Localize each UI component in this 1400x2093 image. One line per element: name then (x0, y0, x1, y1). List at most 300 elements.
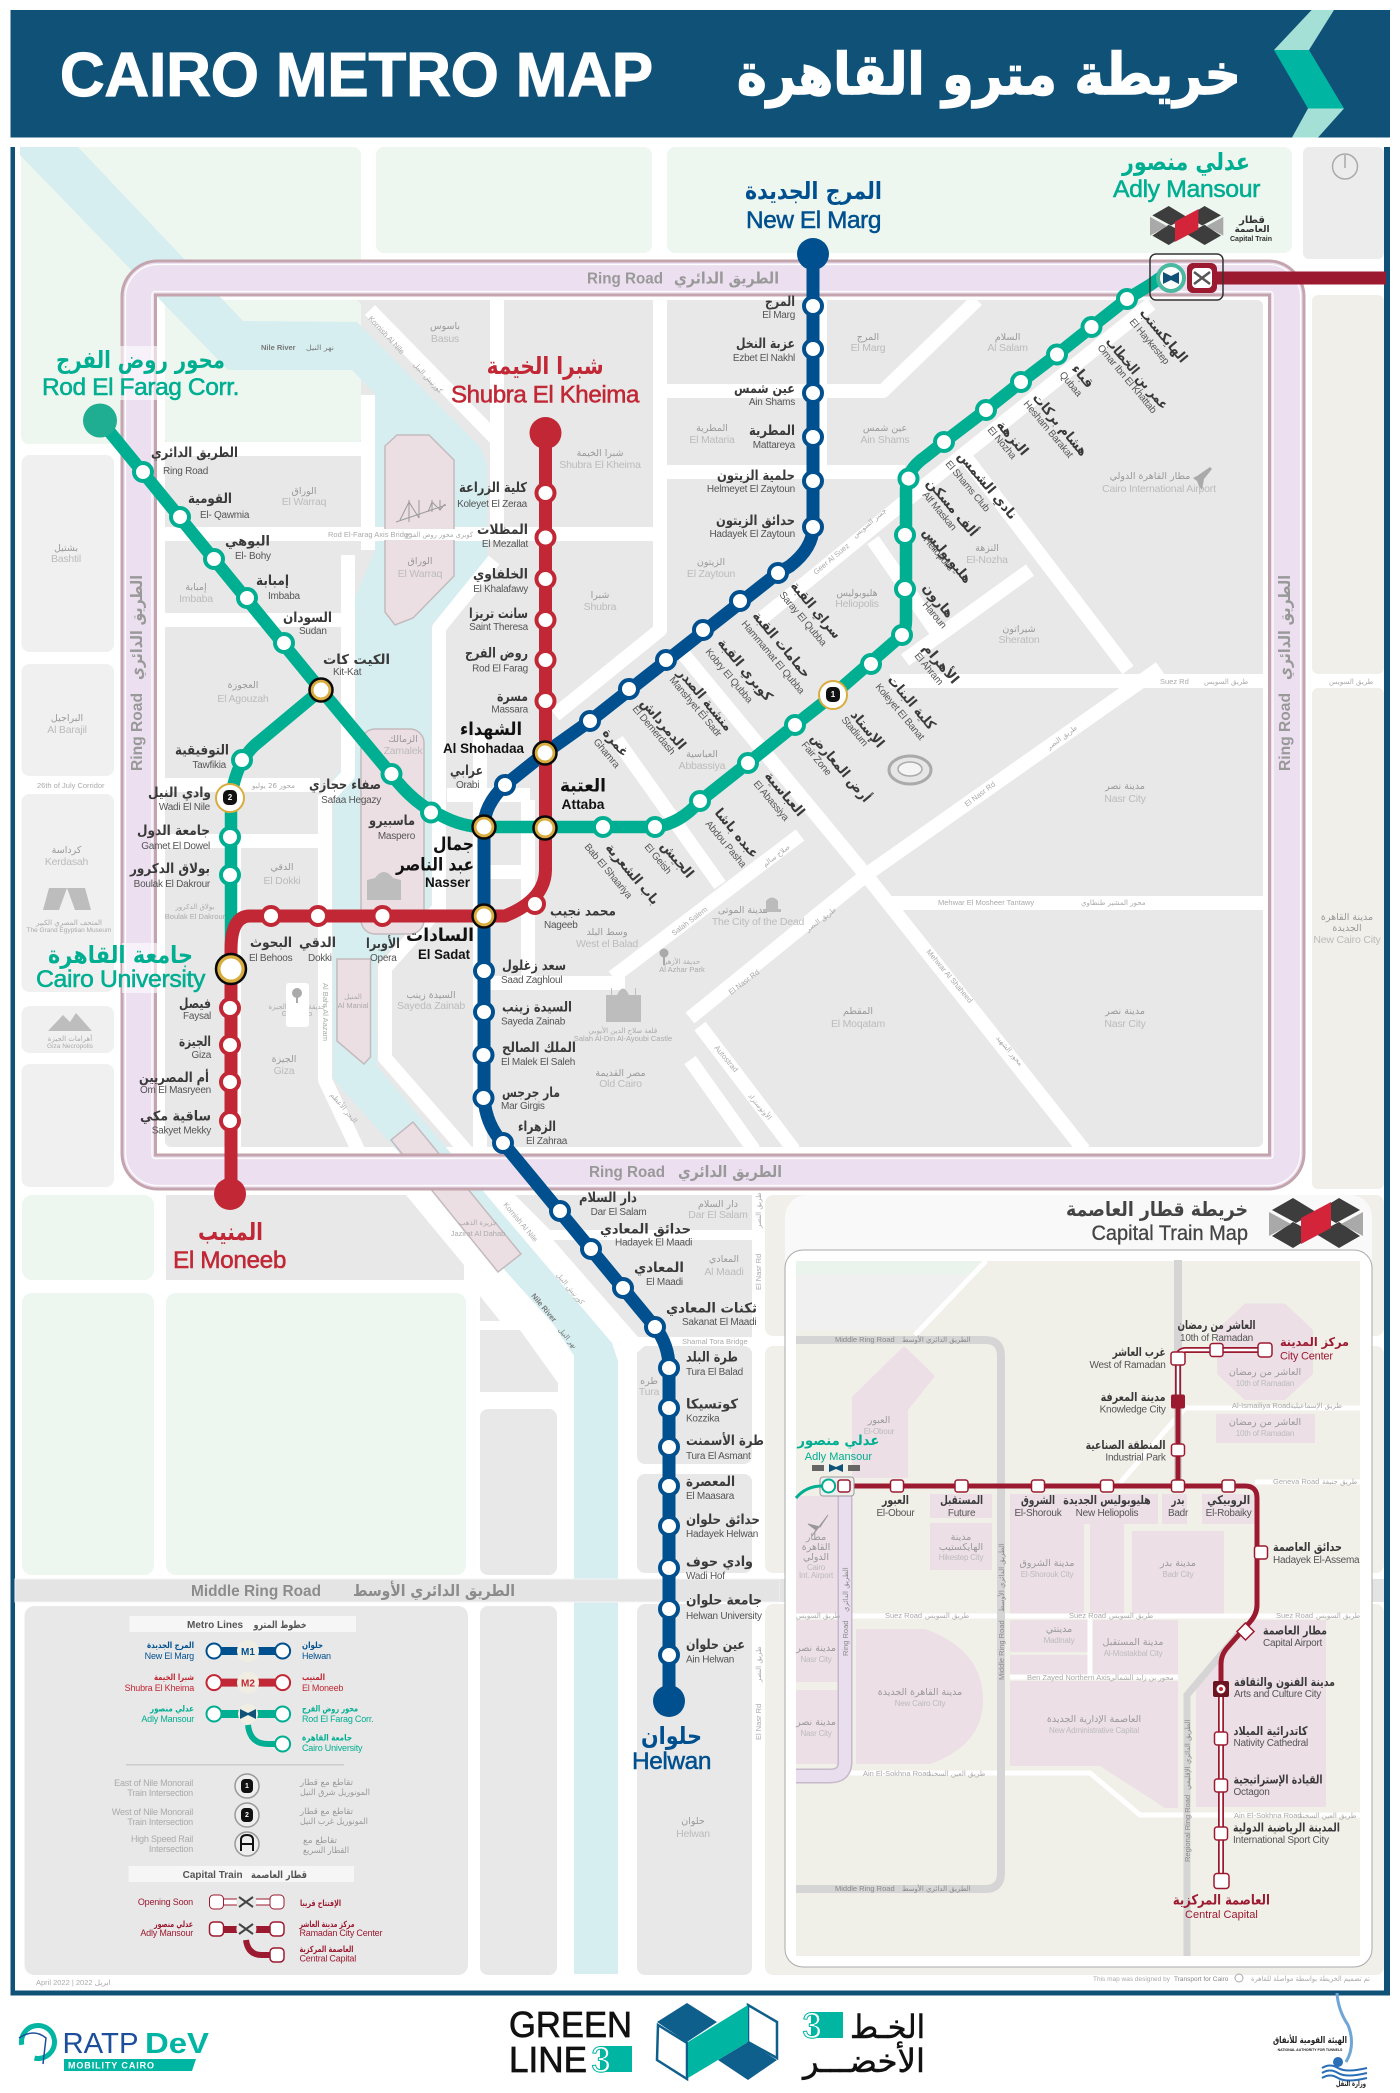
logo: National Authority for Tunnels: وزارة النقل (1336, 2079, 1366, 2088)
ring road white edge lines (126, 264, 1300, 1186)
station: Abdou Pasha: عبده باشا (711, 805, 762, 862)
station: Boulak El Dakrour (129, 861, 211, 890)
station: Gamal Abdel Nasser: Nasser (425, 874, 471, 890)
station: El Mezallat (477, 522, 528, 550)
district and street labels: قلعة صلاح الدين الأيوبي (589, 1026, 657, 1035)
station: Kozzika: كوتسيكا (686, 1397, 738, 1413)
ring road labels (127, 268, 1295, 1182)
map credit: Transport for Cairo (1174, 1976, 1229, 1983)
capital district labels: مدينة بدر (1159, 1558, 1196, 1569)
stations: line 3 (134, 290, 1136, 884)
icon: stadium (889, 756, 931, 784)
district and street labels: جزيرة الذهب (459, 1219, 497, 1227)
station: Hadayek El Maadi: حدائق المعادي (600, 1222, 691, 1238)
legend: line 3: Adly Mansour (141, 1714, 194, 1724)
station: El Haykestep: El Haykestep (1127, 317, 1172, 367)
street network (160, 300, 1268, 1350)
district and street labels: Sayeda Zainab (397, 1000, 465, 1012)
district and street labels: العجوزة (228, 680, 258, 691)
capital district labels: Badr City (1162, 1570, 1194, 1579)
station: El Zahraa: El Zahraa (526, 1136, 568, 1147)
station: International Sport City: المدينة الرياضية الدولية (1233, 1820, 1340, 1836)
station: Helwan University (686, 1592, 762, 1622)
terminal heading: Helwan (632, 1722, 711, 1775)
station: Hadayek Helwan: Hadayek Helwan (686, 1529, 758, 1540)
station: El Marg: المرج (765, 294, 795, 310)
station labels: line 1 north (707, 294, 796, 540)
station: Koleyet El Banat: Koleyet El Banat (873, 682, 926, 743)
station: Ain Shams: عين شمس (734, 381, 795, 397)
district and street labels: دار السلام (698, 1199, 738, 1210)
road name labels: طريق السويس (1329, 678, 1374, 686)
station: El-Robaiky: الروبيكي (1207, 1493, 1250, 1508)
bridge road strip (325, 529, 475, 540)
legend: opening soon (138, 1892, 341, 1912)
logo: capital train top: Capital Train (1230, 236, 1272, 243)
capital road labels (796, 1335, 1361, 1893)
capital road labels: الطريق الدائري الأوسط (997, 1543, 1006, 1612)
station: El Maadi: المعادي (634, 1260, 684, 1276)
station: Opera: الأوبرا (366, 935, 400, 952)
district and street labels: Giza (274, 1065, 295, 1077)
legend: M2 (125, 1672, 343, 1694)
legend: M1: New El Marg (145, 1651, 194, 1661)
station: Gamal Abdel Nasser: جمال (433, 834, 474, 855)
legend: M2: المنيب (302, 1673, 325, 1683)
capital district labels: Madinaty (1044, 1636, 1075, 1645)
station: El Ahram: الأهرام (919, 640, 963, 687)
station: Faysal: Faysal (183, 1011, 211, 1022)
station: Abdou Pasha: Abdou Pasha (703, 819, 748, 870)
capital district labels: القاهرة (802, 1542, 830, 1553)
legend header: Metro Lines: Metro Lines (187, 1620, 244, 1631)
station: Al Shohadaa: Al Shohadaa (443, 740, 524, 756)
legend: opening soon: الإفتتاح قريبا (300, 1899, 341, 1909)
terminals (83, 238, 829, 1717)
capital train opening soon sections (1178, 1350, 1265, 1881)
district and street labels: New Cairo City (1313, 934, 1382, 946)
legend: capital train line: عدلي منصور (153, 1920, 193, 1930)
road name labels: كورنيش النيل (554, 1271, 586, 1307)
logo: Green Line 3: الأخضـــر (801, 2041, 925, 2080)
legend: high speed rail: Intersection (149, 1844, 193, 1854)
legend: capital train line: مركز مدينة العاشر (299, 1920, 354, 1930)
station: Fair Zone: Fair Zone (799, 740, 834, 779)
legend: monorail east: Train Intersection (127, 1788, 193, 1798)
capital district labels: مدينتي (1046, 1624, 1072, 1635)
station: City Center: City Center (1280, 1351, 1333, 1363)
station: El-Bohy: El- Bohy (235, 551, 271, 562)
station: Orabi (450, 763, 483, 791)
logo: capital train top (1150, 206, 1272, 245)
capital district labels: مدينة المستقبل (1103, 1637, 1163, 1648)
station: El Khalafawy (473, 567, 528, 595)
legend: monorail west: 2 (245, 1812, 249, 1819)
station: Octagon (1234, 1773, 1322, 1798)
legend: capital train line: العاصمة المركزية (300, 1945, 354, 1955)
station: Koleyet El Zeraa: كلية الزراعة (459, 480, 527, 496)
road name labels: Suez Rd (1160, 677, 1189, 686)
station: Gamal Abdel Nasser (395, 834, 474, 890)
district and street labels: El Mataria (689, 434, 735, 446)
station: El-Shorouk (1015, 1493, 1063, 1519)
district and street labels: المنيل (344, 993, 362, 1001)
station: Stadium: Stadium (839, 715, 870, 749)
station: Orabi: Orabi (456, 780, 479, 791)
legend: monorail west: تقاطع مع قطار (299, 1807, 354, 1817)
station: El Maasara (686, 1474, 735, 1502)
capital district labels: مدينة (951, 1532, 971, 1543)
station: Safaa Hegazy (309, 777, 381, 806)
terminal heading: Shubra El Kheima: شبرا الخيمة (487, 352, 604, 380)
capital district labels: Int. Airport (799, 1571, 834, 1580)
capital district labels: New Administrative Capital (1049, 1726, 1139, 1735)
station: El-Obour (876, 1493, 915, 1519)
capital road labels: طريق جنيفة (1322, 1478, 1358, 1486)
station: 10th of Ramadan (1178, 1318, 1256, 1344)
station: Opera (366, 935, 400, 964)
capital road labels: Middle Ring Road (997, 1620, 1006, 1680)
station labels: line 1 south (501, 958, 764, 1666)
station: Manshyet El Sadr: Manshyet El Sadr (667, 675, 724, 740)
station: Dar El Salam (579, 1190, 647, 1218)
station: Mattareya (749, 423, 796, 451)
station: Saad Zaghloul: Saad Zaghloul (501, 975, 562, 986)
station: Ain Shams: Ain Shams (749, 397, 795, 408)
road name labels: Kornish Al Nile (501, 1201, 540, 1244)
capital road labels: طريق العين السخنة (1299, 1812, 1357, 1820)
legend: M1: M1 (241, 1647, 255, 1658)
station: Knowledge City: مدينة المعرفة (1101, 1390, 1166, 1404)
title: Arabic: خريطة مترو القاهرة (737, 42, 1241, 108)
station: El-Shorouk: El-Shorouk (1015, 1508, 1063, 1519)
station: Sayeda Zainab: السيدة زينب (502, 1000, 572, 1016)
district and street labels: Giza Zoo (282, 1009, 312, 1018)
capital station: Adly Mansour interchange (820, 1477, 854, 1496)
station: Wadi Hof: Wadi Hof (686, 1571, 725, 1582)
station: Mohamed Nageeb: محمد نجيب (550, 904, 616, 920)
station: Attaba: العتبة (560, 776, 606, 796)
legend header: Capital Train: Capital Train (183, 1870, 243, 1881)
station: Mar Girgis (501, 1085, 560, 1112)
capital district labels: العبور (867, 1415, 890, 1426)
station: Massara (491, 689, 529, 716)
district and street labels: Ain Shams (861, 434, 909, 446)
station: Knowledge City (1100, 1390, 1166, 1416)
legend: high speed rail: القطار السريع (303, 1846, 349, 1856)
road name labels: Salah Salem (670, 905, 709, 938)
station: Ain Helwan: Ain Helwan (686, 1654, 734, 1666)
station: Koleyet El Banat: كلية البنات (884, 672, 939, 733)
station: El-Qawmia (188, 491, 250, 521)
capital city blocks (796, 1304, 1326, 1808)
legend: opening soon: Opening Soon (138, 1897, 193, 1907)
capital district labels: New Cairo City (895, 1699, 945, 1708)
ring road labels: Ring Road (589, 1164, 665, 1181)
station: Future: المستقبل (940, 1493, 983, 1507)
district and street labels: باسوس (430, 321, 460, 332)
station: Mattareya: Mattareya (753, 440, 796, 451)
station: El Khalafawy: الخلفاوي (473, 567, 528, 583)
station: Fair Zone: أرض المعارض (807, 730, 875, 806)
station: Safaa Hegazy: Safaa Hegazy (321, 795, 381, 806)
station: 10th of Ramadan: العاشر من رمضان (1178, 1318, 1256, 1332)
station: Octagon: القيادة الإستراتيجية (1234, 1773, 1322, 1787)
capital road labels: طريق الإسماعيلية (1290, 1402, 1342, 1410)
district and street labels: الجديدة (1332, 923, 1362, 934)
station: Wadi El Nile (148, 785, 211, 813)
road name labels: طريق السويس (1204, 678, 1249, 686)
station: City Center: مركز المدينة (1280, 1335, 1349, 1349)
legend: M2: Shubra El Kheima (125, 1683, 194, 1693)
station: Dar El Salam: دار السلام (579, 1190, 637, 1206)
icon: airport plane (1193, 467, 1212, 490)
capital district labels: العاصمة الإدارية الجديدة (1047, 1714, 1141, 1725)
legend: M1: حلوان (302, 1641, 323, 1651)
station: Adly Mansour capital map (796, 1433, 879, 1463)
district and street labels: Abbassiya (679, 760, 726, 772)
district and street labels: Al Azhar Park (659, 965, 705, 974)
capital district labels: Cairo (807, 1563, 826, 1572)
district and street labels: Al Manial (338, 1001, 369, 1010)
station: Sakyet Mekky: ساقية مكي (140, 1108, 211, 1124)
station: West of Ramadan (1089, 1345, 1166, 1371)
station: Industrial Park: Industrial Park (1105, 1453, 1167, 1464)
district and street labels: Salah Al-Din Al-Ayoubi Castle (574, 1034, 672, 1043)
station: Safaa Hegazy: صفاء حجازي (309, 777, 381, 793)
station: Qubaa: قباء (1068, 361, 1097, 391)
capital regional ring road (1187, 1624, 1247, 1956)
capital district labels: الدولي (803, 1552, 829, 1563)
legend header: Capital Train (129, 1866, 354, 1882)
station: El Maasara: المعصرة (686, 1474, 735, 1490)
station: Attaba (560, 776, 606, 812)
capital station: Arts and Culture marker (1213, 1681, 1229, 1697)
legend: monorail east (114, 1774, 370, 1798)
panel: capital train area (765, 1195, 1384, 1975)
station: El Shams Club: نادي الشمس (954, 448, 1020, 523)
station: Knowledge City: Knowledge City (1100, 1405, 1166, 1416)
capital road labels: الطريق الدائري الأوسط (902, 1335, 971, 1344)
station: El Behoos: El Behoos (249, 953, 293, 964)
station: Wadi Hof: وادي حوف (686, 1554, 753, 1570)
legend: line 3: عدلي منصور (149, 1705, 194, 1715)
district and street labels: The Grand Egyptian Museum (27, 927, 111, 934)
station: Dokki: الدقي (299, 935, 336, 951)
road name labels: محور الشهيد (994, 1034, 1024, 1068)
legend: monorail east: 1 (245, 1783, 249, 1790)
station: Ghamra: غمرة (599, 725, 632, 760)
road name labels: El Nasr Rd (727, 968, 761, 997)
capital road labels: Ben Zayed Northern Axis (1027, 1673, 1111, 1682)
station: Future: Future (948, 1508, 976, 1519)
district and street labels: Giza Necropolis (47, 1043, 94, 1050)
ring road labels: الطريق الدائري (678, 1162, 782, 1182)
station: Qubaa: Qubaa (1057, 370, 1084, 399)
station: Industrial Park: المنطقة الصناعية (1086, 1438, 1166, 1452)
district and street labels: Cairo International Airport (1102, 483, 1216, 495)
station: Ghamra: Ghamra (591, 737, 622, 771)
station: Ezbet El Nakhl: عزبة النخل (736, 336, 795, 352)
stations: line 1 (474, 297, 822, 1664)
station: Sakyet Mekky: Sakyet Mekky (152, 1126, 211, 1136)
capital road labels: الطريق الدائري (842, 1567, 850, 1612)
road name labels: Shamal Tora Bridge (682, 1337, 748, 1346)
district and street labels: El Zaytoun (687, 568, 735, 580)
station: Al Shohadaa (443, 719, 524, 756)
station: Haroun: Haroun (920, 600, 948, 631)
road name labels: كورنيش النيل (412, 361, 445, 395)
station: Industrial Park (1086, 1438, 1167, 1464)
capital road labels: Middle Ring Road (835, 1884, 895, 1893)
station: El-Bohy (225, 534, 271, 562)
district and street labels: بشتيل (54, 543, 78, 554)
capital district labels: Hikestep City (939, 1553, 983, 1562)
station: Maspero (368, 813, 416, 842)
district and street labels: الزيتون (697, 557, 725, 568)
district and street labels: Al Maadi (704, 1266, 744, 1278)
station: Stadium: الإستاد (847, 707, 887, 751)
header banner (10, 10, 1390, 138)
legend: line 3 (141, 1704, 373, 1753)
station: Saray El Qubba: Saray El Qubba (777, 590, 829, 649)
station: Saint Theresa (469, 606, 529, 633)
district and street labels: مدينة نصر (1104, 1006, 1145, 1017)
capital map title: خريطة قطار العاصمة (1066, 1197, 1248, 1221)
station: Nativity Cathedral (1234, 1724, 1308, 1749)
station: El-Shorouk: الشروق (1021, 1493, 1055, 1508)
station: Hadayek Helwan (686, 1512, 760, 1540)
legend header: Metro Lines: خطوط المترو (253, 1620, 307, 1631)
station: El Malek El Saleh (501, 1040, 576, 1068)
logo: Green Line 3: 3 (802, 2005, 822, 2046)
legend: monorail west: West of Nile Monorail (112, 1807, 193, 1817)
capital road labels: Suez Road (1069, 1611, 1106, 1620)
logo mark: cube (657, 2003, 777, 2080)
station: El Abassiya: El Abassiya (751, 779, 791, 824)
capital road labels: Ain El-Sokhna Road (863, 1769, 931, 1778)
station: Capital Airport: مطار العاصمة (1263, 1624, 1327, 1638)
station: Rod El Farag (465, 646, 528, 674)
line 3 Cairo University branch (231, 690, 321, 969)
legend: M2: El Moneeb (302, 1683, 343, 1693)
district and street labels: Shubra (584, 601, 617, 613)
station: Hadayek El-Assema: حدائق العاصمة (1273, 1540, 1342, 1554)
capital road labels: طريق السويس (1109, 1612, 1154, 1620)
station: Tura El Balad: Tura El Balad (686, 1367, 743, 1378)
district and street labels: إمبابة (185, 582, 207, 593)
station: Helmeyet El Zaytoun (707, 468, 795, 495)
capital district labels: مدينة نصر (795, 1717, 836, 1728)
road name labels: صلاح سالم (761, 843, 792, 869)
line 2 red (231, 433, 546, 1194)
capital station: Knowledge City marker (1171, 1394, 1185, 1408)
legend: high speed rail (131, 1832, 349, 1856)
station: Om El Masryeen: أم المصريين (139, 1069, 209, 1086)
station: Bab El Shaariya (582, 840, 662, 908)
station: Mar Girgis: Mar Girgis (501, 1101, 545, 1112)
station: Hadayek El-Assema: Hadayek El-Assema (1273, 1555, 1360, 1566)
station: Sakanat El Maadi: Sakanat El Maadi (682, 1317, 756, 1328)
station: Gamet El Dowel (137, 823, 210, 852)
station: New Heliopolis: هليوبوليس الجديدة (1063, 1493, 1151, 1508)
station: Ring Road: الطريق الدائري (151, 445, 238, 461)
capital road labels: طريق السويس (796, 1612, 841, 1620)
station: Omar Ibn El Khattab: عمر بن الخطاب (1102, 334, 1171, 413)
station: Kit-Kat (323, 652, 390, 678)
station: El Geish: الجيش (657, 838, 697, 882)
monorail interchange: Stadium: 1 (831, 690, 836, 699)
title: Cairo Metro Map: CAIRO METRO MAP (60, 41, 653, 110)
Nile river (20, 147, 618, 1974)
date note: April 2022 | 2022 ابريل (36, 1978, 111, 1987)
station: Boulak El Dakrour: Boulak El Dakrour (134, 879, 211, 890)
terminal heading: Shubra El Kheima (451, 352, 640, 409)
station: Ain Shams (734, 381, 795, 408)
station: El-Robaiky (1206, 1493, 1252, 1519)
capital district labels: العاشر من رمضان (1229, 1367, 1301, 1378)
logo: Green Line 3: LINE (509, 2039, 587, 2080)
legend: monorail east: East of Nile Monorail (114, 1778, 193, 1788)
station: West of Ramadan: غرب العاشر (1112, 1345, 1166, 1359)
district and street labels: Tura (639, 1386, 660, 1398)
icon: pyramids (48, 1013, 92, 1031)
legend: M1 (145, 1640, 331, 1662)
station: Ghamra (591, 725, 632, 771)
capital road labels: طريق السويس (1316, 1612, 1361, 1620)
district and street labels: Basus (431, 333, 459, 345)
district and street labels: Boulak El Dakrour (165, 912, 226, 921)
capital district labels: الهايكستيب (939, 1542, 983, 1553)
district and street labels: Al Barajil (47, 724, 87, 736)
station: Central Capital: العاصمة المركزية (1173, 1892, 1270, 1908)
station: Giza (179, 1034, 212, 1061)
capital ring road fill (796, 1490, 845, 1776)
station: Hesham Barakat: Hesham Barakat (1021, 399, 1075, 461)
station: Helwan University: جامعة حلوان (686, 1592, 762, 1608)
station: El-Qawmia: القومية (188, 491, 232, 507)
station: Gamet El Dowel: جامعة الدول (137, 823, 210, 839)
logo: RATP Dev (19, 2023, 210, 2071)
station: El Mezallat: El Mezallat (482, 539, 528, 550)
capital train line (844, 1350, 1265, 1881)
station: Hadayek Helwan: حدائق حلوان (686, 1512, 760, 1528)
terminal heading: Adly Mansour: عدلي منصور (1121, 148, 1250, 176)
station: Manshyet El Sadr: منشية الصدر (673, 665, 736, 735)
logo: Green Line 3: 3 (591, 2039, 611, 2080)
legend panel (112, 1616, 382, 1964)
station: Kit-Kat: Kit-Kat (333, 667, 362, 678)
terminal heading: El Moneeb (173, 1218, 286, 1274)
station: Omar Ibn El Khattab: Omar Ibn El Khattab (1095, 343, 1159, 416)
station: Hadayek El Maadi: Hadayek El Maadi (615, 1238, 692, 1248)
station: Alf Maskan: Alf Maskan (920, 490, 958, 533)
station: Imbaba: Imbaba (268, 591, 301, 602)
icon: zoo tree (286, 983, 309, 1027)
station: Maspero: ماسبيرو (368, 813, 415, 829)
legend: monorail east: تقاطع مع قطار (299, 1778, 354, 1788)
capital road labels: Ain El-Sokhna Road (1234, 1811, 1302, 1820)
station: Sayeda Zainab: Sayeda Zainab (501, 1016, 566, 1028)
station: El Khalafawy: El Khalafawy (473, 584, 528, 595)
ring road labels: الطريق الدائري (674, 268, 779, 288)
terminal heading: Rod El Farag: محور روض الفرج (56, 346, 225, 374)
district and street labels: مدينة القاهرة (1321, 912, 1373, 923)
road name labels: Nile River (529, 1292, 559, 1324)
capital district labels: مطار (805, 1532, 826, 1543)
legend: M2: شبرا الخيمة (154, 1673, 194, 1683)
icon: Salah al-din castle mosque (606, 988, 641, 1022)
